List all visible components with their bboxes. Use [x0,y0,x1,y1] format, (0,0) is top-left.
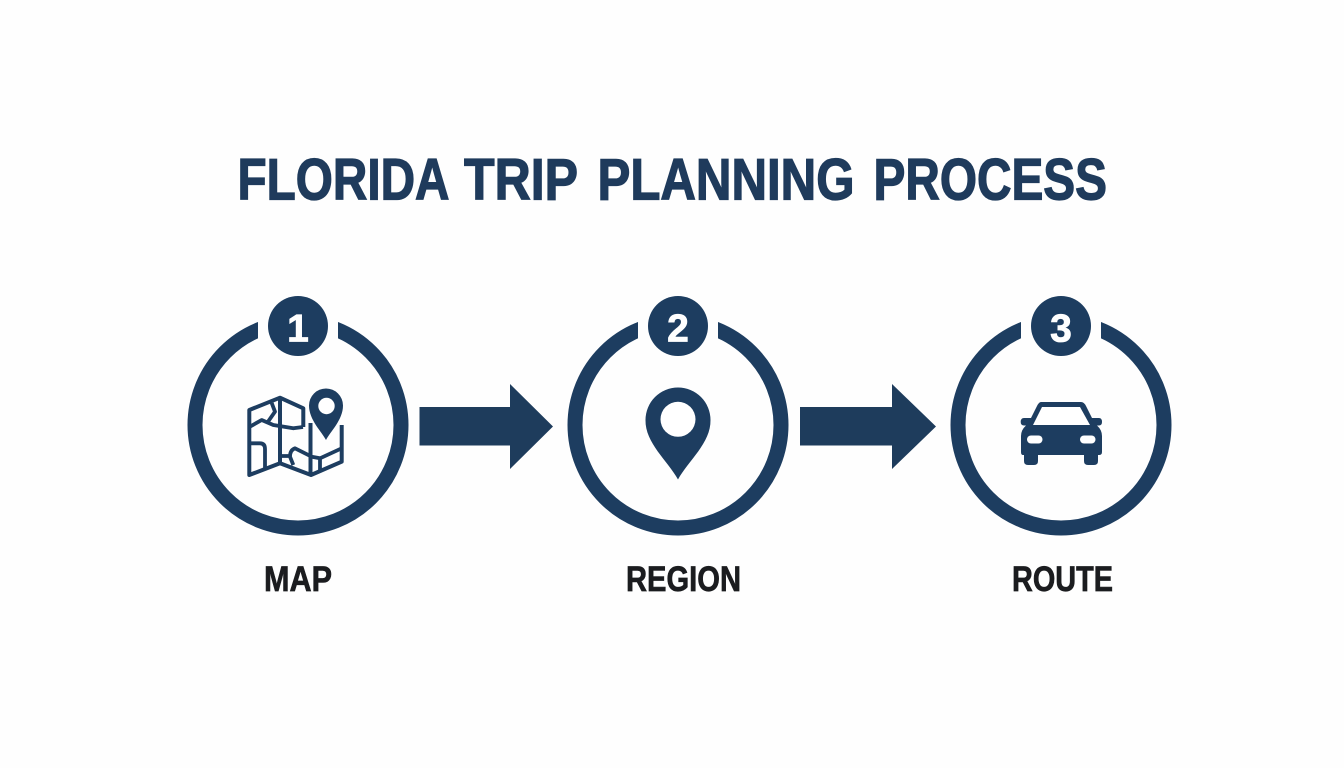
arrow: region to route [800,384,936,469]
step 2: region [575,296,781,599]
title: FLORIDA [238,147,450,212]
icon: car front view [1021,402,1102,465]
step 1 number badge [268,296,328,356]
title [238,147,1107,212]
step 3: route [958,296,1164,599]
step 3 ring [958,305,1164,528]
arrow: map to region [420,384,553,469]
step 3 label: ROUTE [1012,560,1113,599]
step 1 label: MAP [264,560,332,599]
title: TRIP [464,147,578,212]
step 3 number badge: 3 [1050,308,1072,350]
step 2 number badge: 2 [667,308,689,350]
step 1 number badge: 1 [287,308,309,350]
icon: location pin [645,388,711,480]
title: PLANNING [598,147,854,212]
step 2 label: REGION [626,560,741,599]
step 2 number badge [648,296,708,356]
icon: folded map with pin [249,388,343,475]
step 3 number badge [1031,296,1091,356]
step 1: map [195,296,401,599]
step 1 ring [195,305,401,528]
step 2 ring [575,305,781,528]
title: PROCESS [874,147,1107,212]
